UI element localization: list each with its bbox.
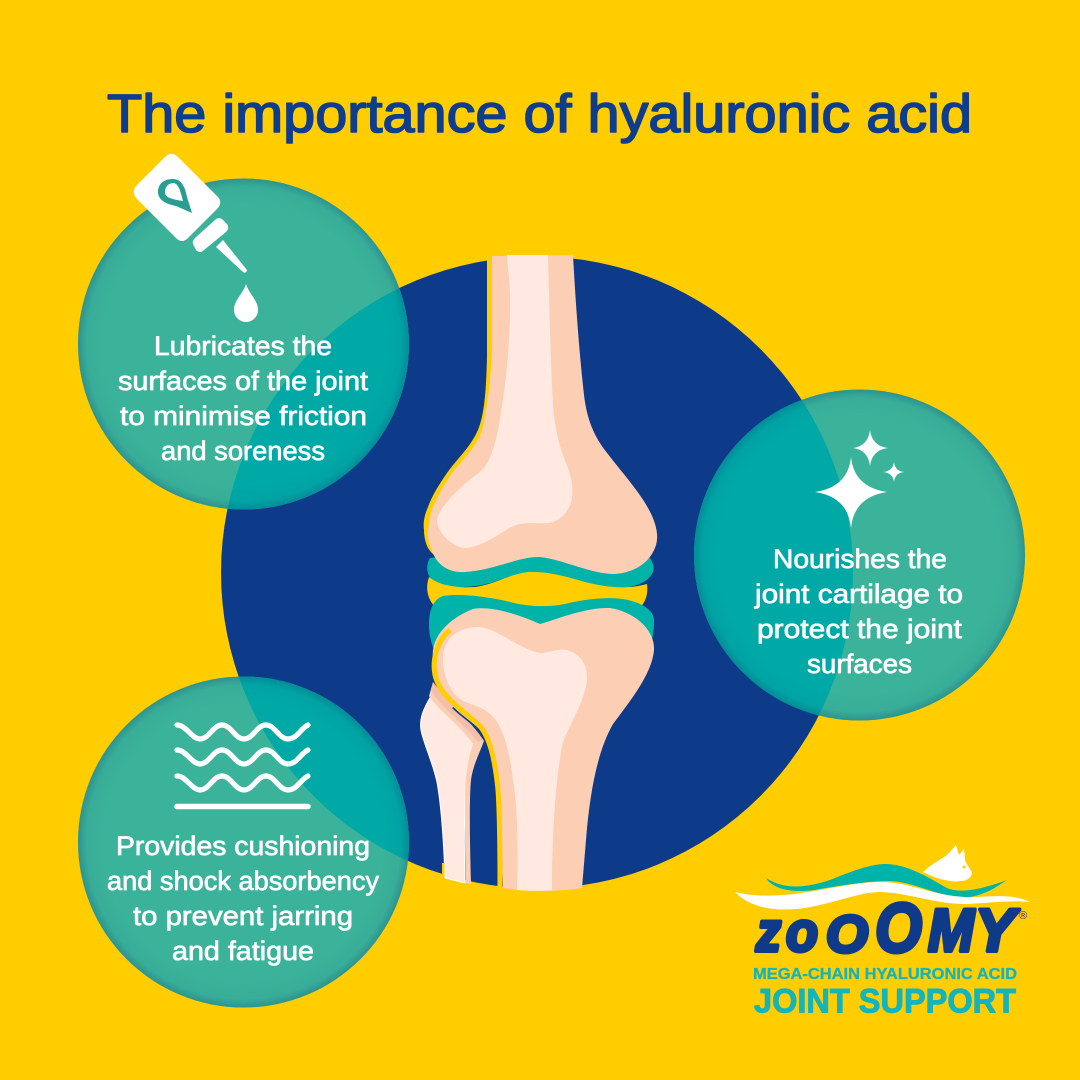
icon: sparkles	[815, 430, 904, 528]
logo: wordmark: z	[755, 900, 781, 963]
logo: subtitle: MEGA-CHAIN HYALURONIC ACID	[753, 966, 1017, 983]
drop	[234, 284, 258, 322]
femur yellow stripe	[424, 258, 493, 564]
fibula	[421, 682, 484, 884]
text block	[107, 831, 380, 966]
upper cartilage	[427, 545, 654, 588]
title: The importance of hyaluronic acid	[107, 84, 972, 144]
text block: to minimise friction	[120, 401, 367, 431]
circle	[78, 676, 409, 1008]
bottle pin mark	[158, 179, 192, 213]
dark gap	[452, 706, 487, 738]
text block: Provides cushioning	[116, 831, 370, 861]
text block: and soreness	[161, 436, 325, 466]
text block: Lubricates the	[154, 331, 332, 361]
logo: wordmark: M	[928, 897, 976, 964]
blue background circle	[221, 256, 853, 888]
fibula head	[429, 682, 484, 884]
text block: and shock absorbency	[107, 866, 380, 896]
tibia inner bone	[443, 627, 587, 891]
icon: waves	[177, 725, 308, 806]
tibia small yellow mark	[442, 863, 444, 876]
logo: registered mark: ®	[1019, 910, 1027, 922]
fibula head shade	[431, 682, 484, 742]
panel: lubricates	[78, 154, 409, 509]
circle	[694, 390, 1025, 720]
panel: cushioning	[78, 676, 409, 1008]
text block	[754, 544, 963, 679]
logo: teal wave	[766, 864, 1007, 898]
femur inner bone	[437, 255, 573, 548]
lower cartilage	[429, 595, 654, 650]
text block	[118, 331, 369, 466]
logo: wordmark: Y	[975, 897, 1020, 964]
logo: wordmark: O	[875, 889, 922, 967]
logo	[735, 845, 1030, 1020]
femur outer bone	[428, 255, 657, 574]
tibia outer bone	[433, 608, 654, 891]
text block: protect the joint	[757, 614, 963, 644]
logo: cat	[923, 845, 972, 881]
knee joint illustration	[421, 255, 657, 891]
text block: joint cartilage to	[754, 579, 963, 609]
logo: wordmark: O	[826, 906, 868, 964]
tibia yellow stripe	[434, 630, 500, 888]
fibula shaft	[421, 695, 474, 883]
panel: nourishes	[694, 390, 1025, 720]
text block: surfaces	[807, 649, 912, 679]
circle	[78, 178, 409, 510]
logo: wordmark	[755, 889, 1020, 967]
logo: white wave	[735, 882, 1030, 909]
logo: wordmark: o	[786, 900, 818, 963]
text block: Nourishes the	[773, 544, 947, 574]
tibia	[433, 608, 654, 891]
icon: dropper bottle	[134, 154, 258, 322]
text block: and fatigue	[172, 936, 314, 966]
femur	[424, 255, 657, 574]
joint fluid	[427, 572, 647, 608]
text block: to prevent jarring	[133, 901, 353, 931]
logo: joint support: JOINT SUPPORT	[754, 982, 1016, 1020]
text block: surfaces of the joint	[118, 366, 369, 396]
